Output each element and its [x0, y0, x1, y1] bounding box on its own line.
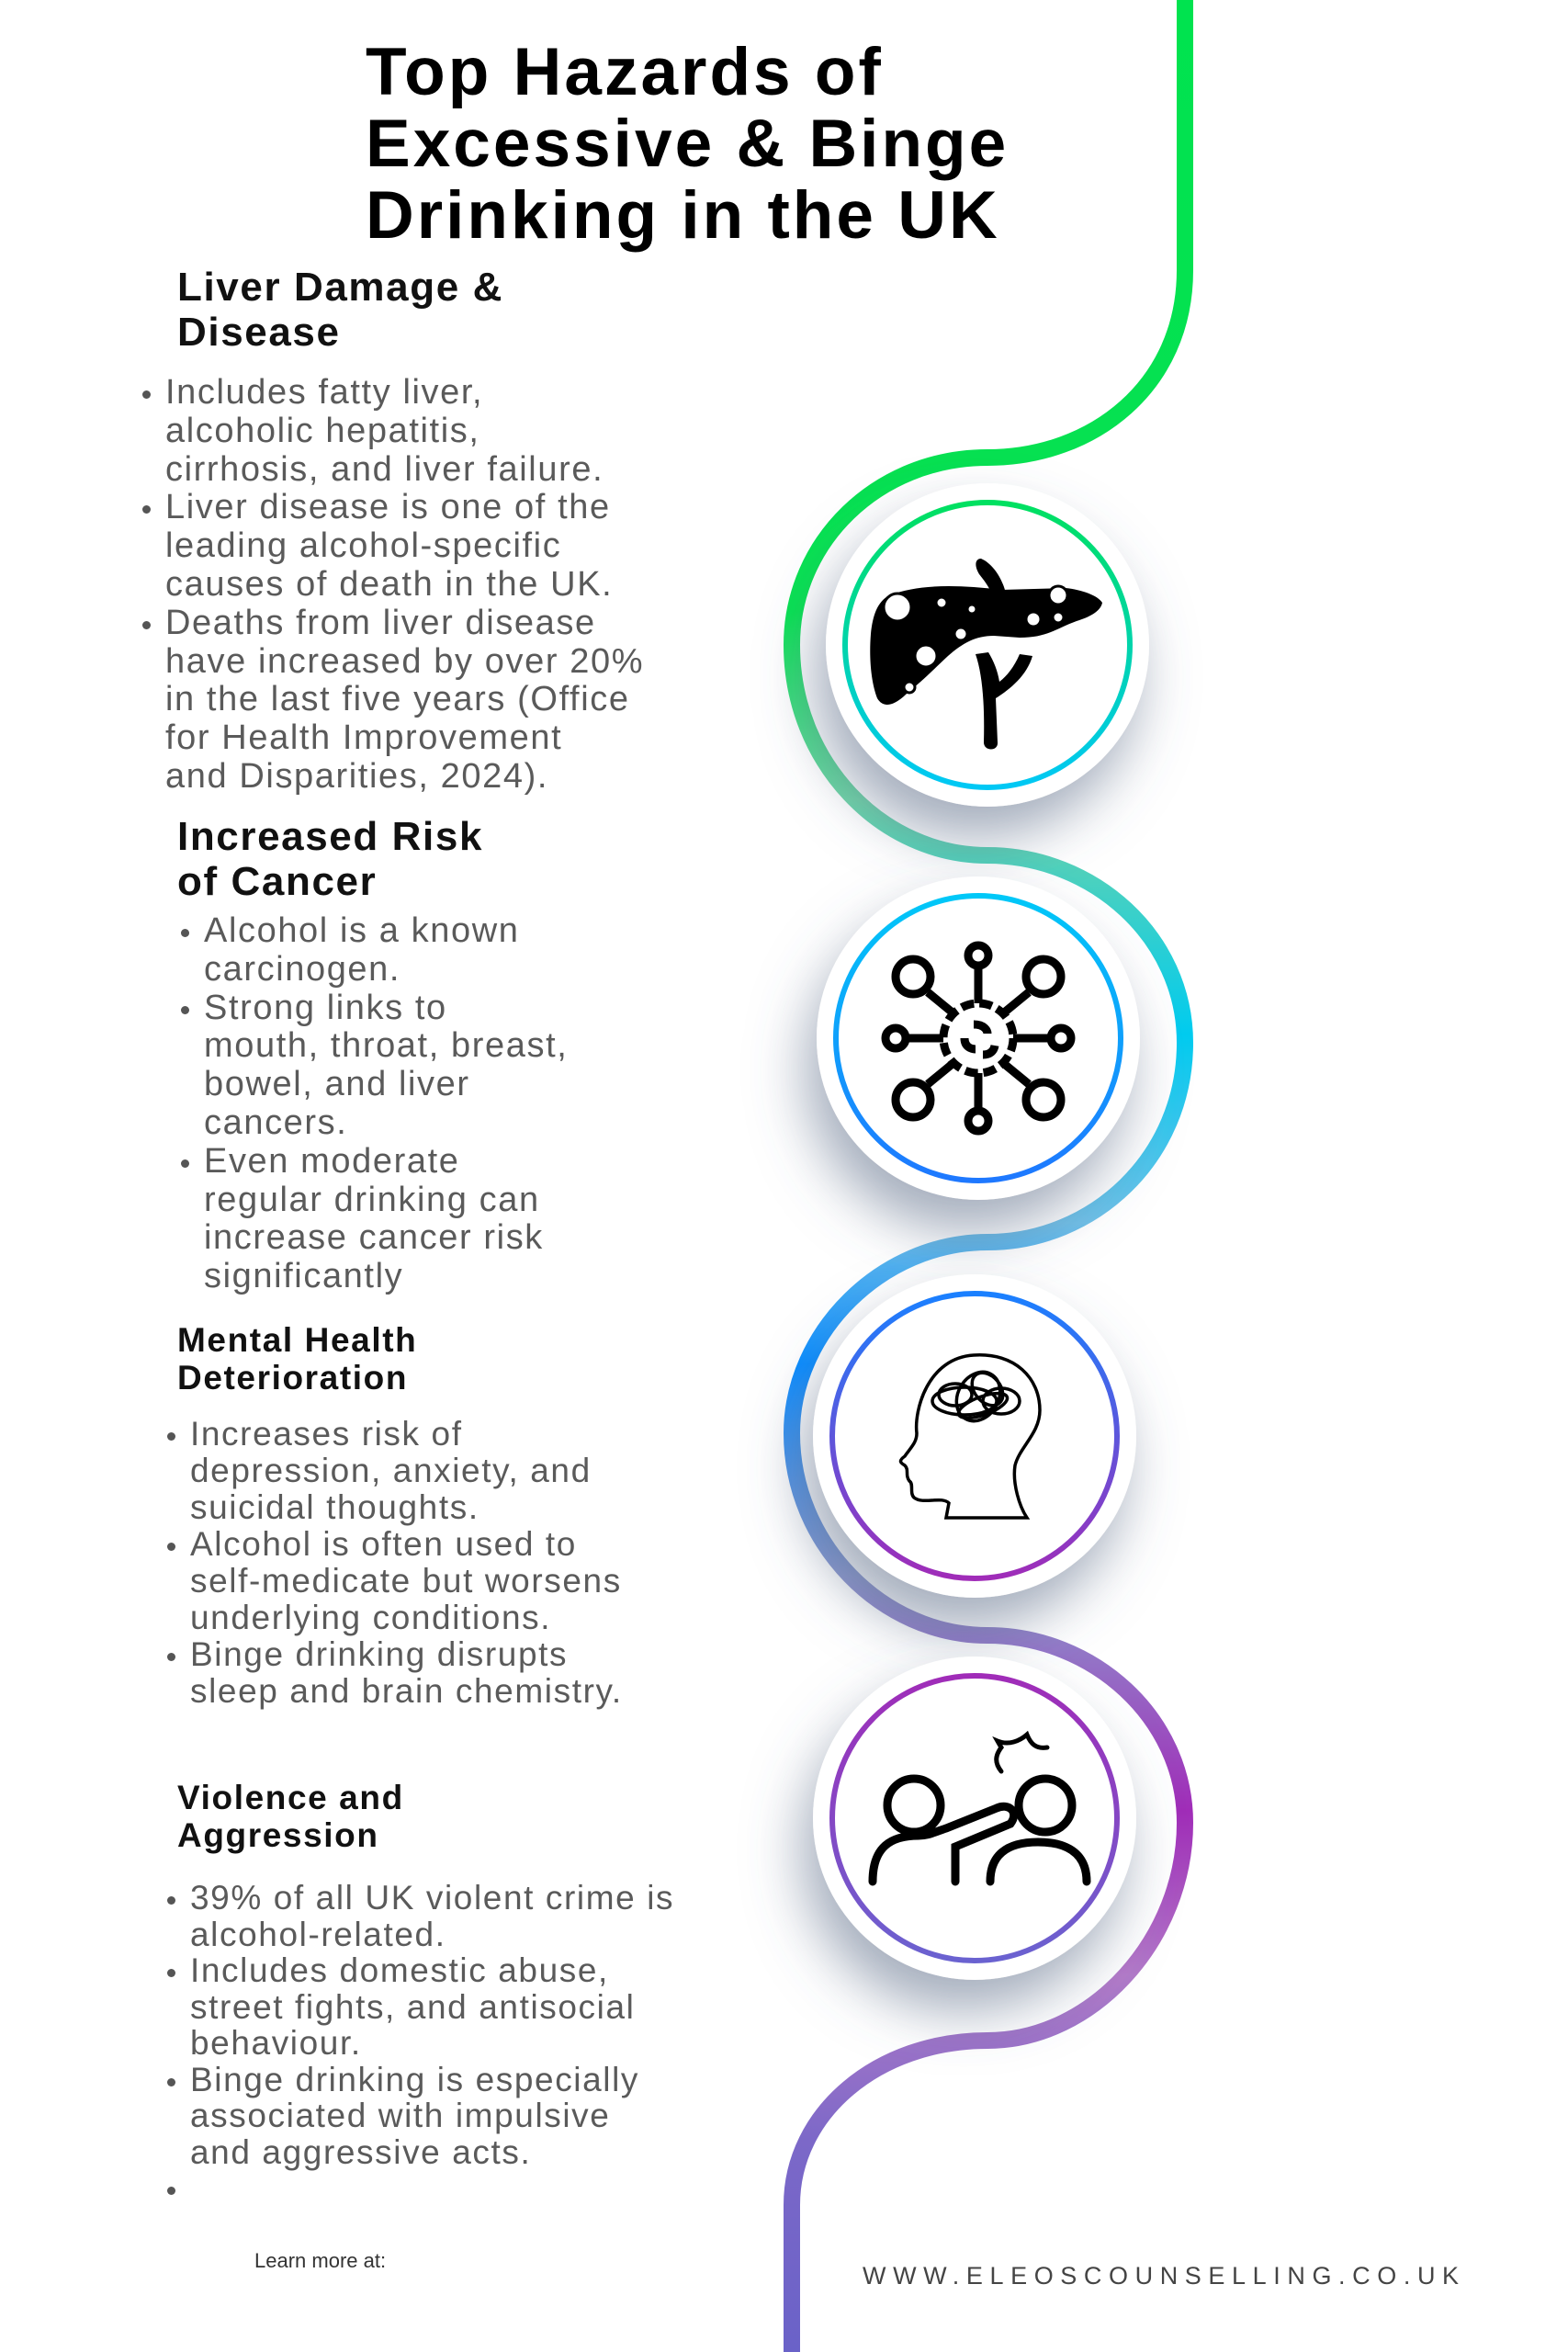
bullets: liver: causes of death in the UK.	[165, 565, 613, 604]
heading: cancer: Increased Risk	[177, 814, 483, 859]
heading: violence	[177, 1779, 404, 1854]
bullets: liver: in the last five years (Office	[165, 680, 630, 718]
bullets: liver: leading alcohol-specific	[165, 526, 561, 565]
bullets: violence: associated with impulsive	[190, 2097, 610, 2134]
bullets: liver: for Health Improvement	[165, 718, 562, 757]
bullets: liver: Includes fatty liver,	[165, 373, 483, 412]
bullets: mental health: sleep and brain chemistry.	[190, 1672, 623, 1710]
bullets: violence: Includes domestic abuse,	[190, 1951, 609, 1989]
heading: liver	[177, 265, 503, 355]
bullets: mental health: underlying conditions.	[190, 1599, 551, 1636]
bullets: mental health: Binge drinking disrupts	[190, 1635, 568, 1673]
bullets: cancer: bowel, and liver	[204, 1065, 470, 1103]
heading: violence: Violence and	[177, 1779, 404, 1816]
bullets: mental health: Increases risk of	[190, 1415, 463, 1453]
learn more label: Learn more at:	[254, 2249, 386, 2272]
bullets: liver: have increased by over 20%	[165, 642, 644, 681]
title	[366, 35, 1009, 253]
bullets: cancer: increase cancer risk	[204, 1218, 544, 1257]
winding path	[792, 0, 1185, 2352]
bullets: cancer: Even moderate	[204, 1142, 460, 1181]
bullets: mental health: Alcohol is often used to	[190, 1525, 577, 1563]
bullets: mental health: depression, anxiety, and	[190, 1452, 592, 1489]
bullets: cancer: cancers.	[204, 1103, 347, 1142]
icon circle: liver	[826, 483, 1149, 807]
bullets: cancer: Strong links to	[204, 989, 447, 1027]
bullets: cancer: significantly	[204, 1257, 403, 1295]
title: Top Hazards of	[366, 35, 884, 109]
bullets: violence: street fights, and antisocial	[190, 1988, 635, 2025]
title: Drinking in the UK	[366, 178, 1000, 253]
bullets: liver: cirrhosis, and liver failure.	[165, 450, 604, 489]
bullets: liver: alcoholic hepatitis,	[165, 412, 480, 450]
icon: liver	[870, 559, 1102, 750]
heading: cancer	[177, 814, 483, 904]
icon circle: violence	[813, 1657, 1136, 1980]
bullets: violence: Binge drinking is especially	[190, 2060, 639, 2098]
title: Excessive & Binge	[366, 107, 1009, 181]
bullets: violence: behaviour.	[190, 2024, 362, 2062]
bullets: mental health: self-medicate but worsens	[190, 1562, 622, 1600]
heading: mental health: Deterioration	[177, 1359, 408, 1396]
bullets: cancer: carcinogen.	[204, 950, 400, 989]
bullets: violence	[167, 1879, 674, 2195]
heading: liver: Disease	[177, 310, 341, 355]
heading: violence: Aggression	[177, 1816, 379, 1854]
bullets: liver	[142, 373, 644, 796]
bullets: violence: alcohol-related.	[190, 1915, 446, 1953]
icon: two people fighting	[873, 1735, 1087, 1882]
bullets: cancer: Alcohol is a known	[204, 911, 520, 950]
bullets: liver: Deaths from liver disease	[165, 604, 596, 642]
icon circle: mental health	[813, 1274, 1136, 1598]
bullets: cancer	[181, 911, 568, 1295]
bullets: violence: 39% of all UK violent crime is	[190, 1879, 674, 1917]
icon: virus cell	[886, 945, 1071, 1131]
bullets: mental health: suicidal thoughts.	[190, 1488, 479, 1526]
heading: liver: Liver Damage &	[177, 265, 503, 310]
icon circle: cancer	[817, 876, 1140, 1200]
bullets: liver: Liver disease is one of the	[165, 488, 611, 526]
bullets: cancer: regular drinking can	[204, 1181, 540, 1219]
heading: mental health: Mental Health	[177, 1321, 417, 1359]
bullets: mental health	[167, 1415, 623, 1710]
heading: mental health	[177, 1321, 417, 1396]
bullets: liver: and Disparities, 2024).	[165, 757, 548, 796]
icon: head with tangled brain	[900, 1355, 1040, 1518]
website url: WWW.ELEOSCOUNSELLING.CO.UK	[863, 2262, 1466, 2290]
bullets: violence: and aggressive acts.	[190, 2133, 531, 2170]
heading: cancer: of Cancer	[177, 859, 377, 904]
bullets: cancer: mouth, throat, breast,	[204, 1026, 568, 1065]
